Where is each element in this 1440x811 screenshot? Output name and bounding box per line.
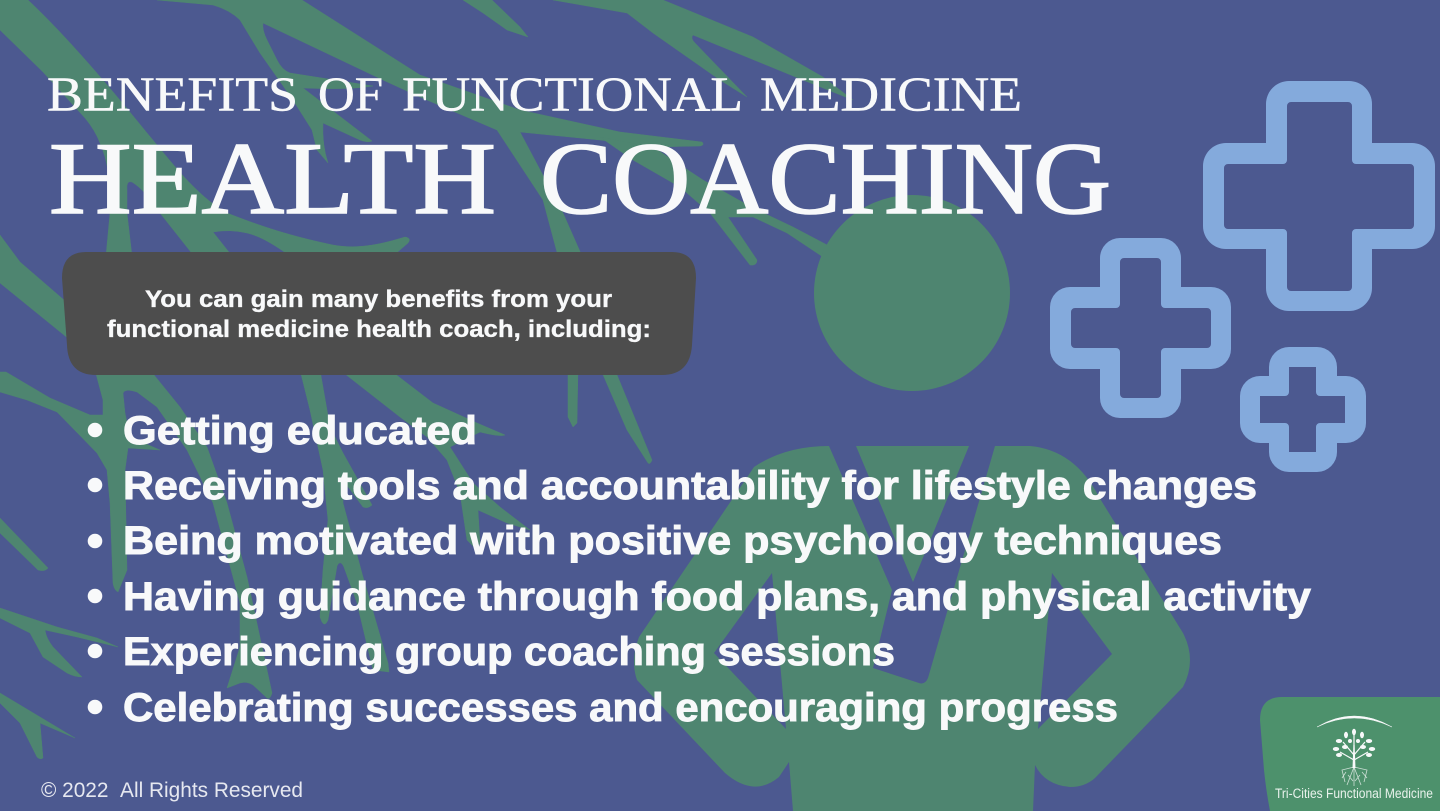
list: coaching benefits: Experiencing group coaching sessions [123, 630, 895, 674]
icon: logo arc [1317, 716, 1392, 727]
title: subheading: BENEFITS [47, 66, 298, 122]
title: subheading: OF [318, 66, 383, 122]
title: subheading: MEDICINE [760, 66, 1022, 122]
list: coaching benefits: Being motivated with positive psychology techniques [123, 519, 1222, 563]
title: subheading: FUNCTIONAL [402, 66, 743, 122]
background: person silhouette [634, 195, 1190, 811]
icon: large medical cross [1203, 81, 1435, 311]
list: coaching benefits [88, 409, 1312, 730]
footer: copyright: © 2022 All Rights Reserved [41, 779, 303, 802]
panel: logo badge [1260, 697, 1440, 811]
list: coaching benefits: Celebrating successes and encouraging progress [123, 686, 1118, 730]
icon: logo tree [1333, 729, 1375, 786]
panel: intro callout [62, 252, 696, 375]
background: tree branches [0, 0, 853, 759]
list: coaching benefits: Getting educated [123, 409, 477, 453]
list: coaching benefits: Receiving tools and accountability for lifestyle changes [123, 464, 1257, 508]
title: main heading: COACHING [540, 122, 1111, 236]
icon: medium medical cross [1050, 238, 1231, 418]
title: subheading [47, 66, 1022, 122]
panel: intro callout: functional medicine health coach, including: [107, 316, 651, 343]
title: main heading: HEALTH [49, 122, 496, 236]
panel: intro callout: You can gain many benefits from your [145, 286, 612, 313]
icon: small medical cross [1240, 347, 1366, 472]
title: main heading [49, 122, 1111, 236]
list: coaching benefits: Having guidance through food plans, and physical activity [123, 575, 1312, 619]
